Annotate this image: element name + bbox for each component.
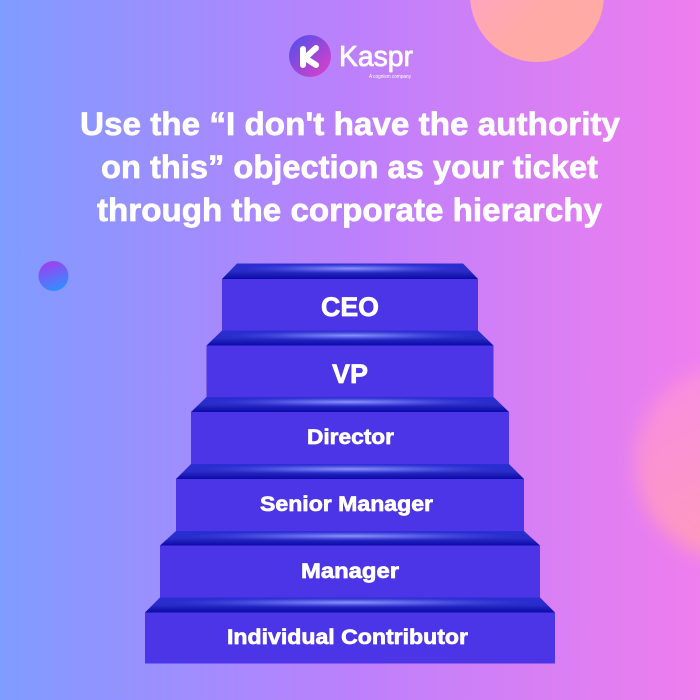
decorative gradient dot bbox=[38, 261, 68, 291]
decorative peach circle bbox=[470, 0, 604, 62]
decorative blurred circle bbox=[635, 365, 700, 559]
step: VP bbox=[206, 330, 494, 397]
step: Individual Contributor bbox=[145, 598, 555, 664]
title bbox=[80, 106, 620, 228]
title: Use the “I don't have the authority bbox=[80, 106, 620, 142]
staircase bbox=[145, 264, 555, 664]
step: Manager: Manager bbox=[301, 560, 399, 583]
title: through the corporate hierarchy bbox=[97, 192, 602, 228]
step: Individual Contributor: Individual Contributor bbox=[227, 626, 468, 649]
step: Director: Director bbox=[307, 426, 394, 449]
logo icon bbox=[289, 35, 331, 77]
logo wordmark: Kaspr bbox=[339, 41, 413, 73]
title: on this” objection as your ticket bbox=[101, 149, 598, 185]
step: Manager bbox=[160, 531, 540, 598]
step: Director bbox=[191, 397, 509, 464]
step: CEO: CEO bbox=[321, 292, 379, 322]
logo bbox=[289, 35, 413, 80]
logo tagline: A cognism company bbox=[369, 74, 411, 80]
step: CEO bbox=[222, 264, 478, 330]
step: Senior Manager bbox=[176, 464, 524, 531]
step: Senior Manager: Senior Manager bbox=[260, 493, 433, 516]
step: VP: VP bbox=[332, 359, 368, 389]
